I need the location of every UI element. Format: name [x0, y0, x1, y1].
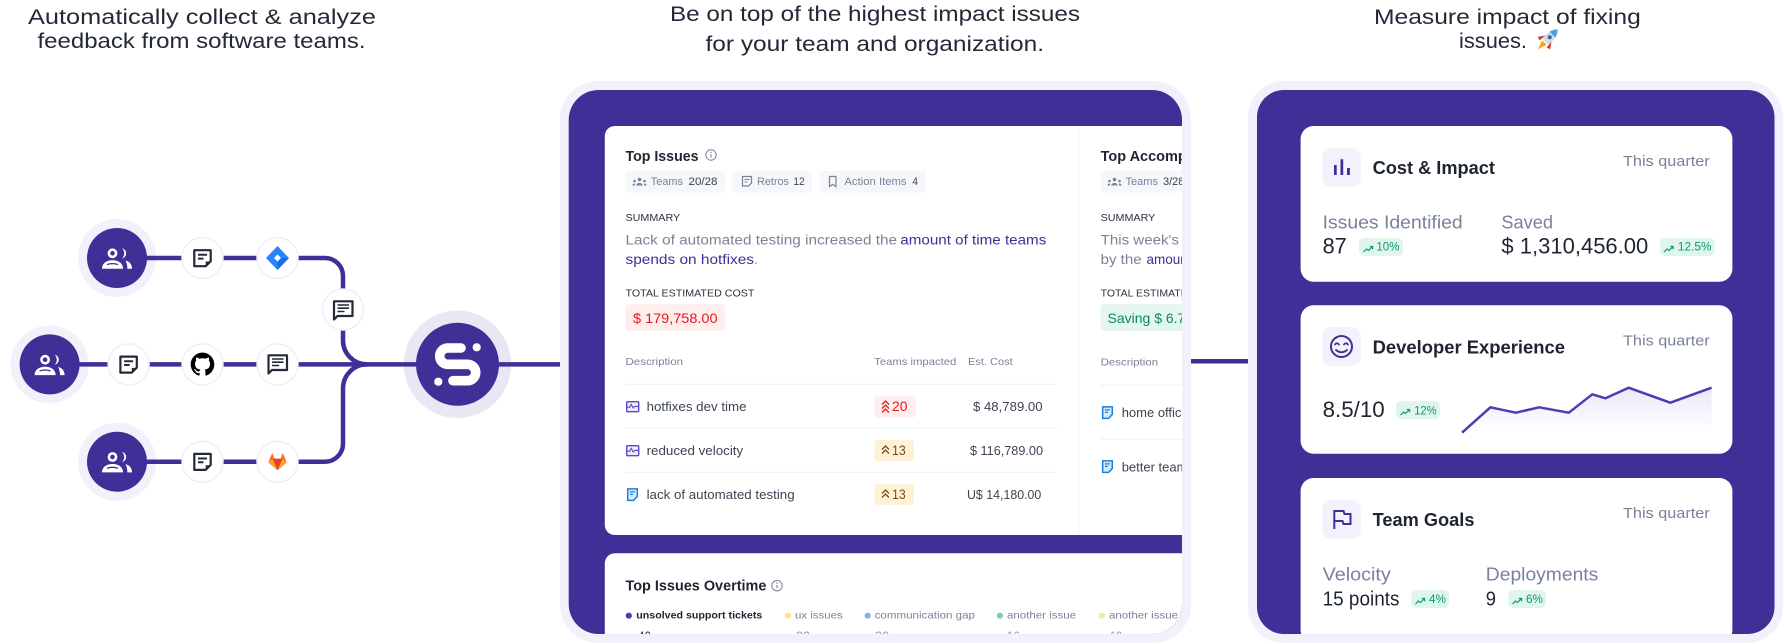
heading: highest impact issues: Be on top of the highest impact issues [670, 3, 1080, 26]
card: cost and impact: 87 [1323, 233, 1347, 258]
row: hotfixes dev time [627, 396, 1043, 417]
icon: smile [1322, 327, 1361, 366]
chart legend: ux issues [795, 610, 843, 622]
column: top accomplishments: better team [1122, 459, 1187, 474]
team node 1 [87, 228, 147, 288]
card: developer experience [1301, 305, 1732, 454]
icon: flag [1322, 500, 1361, 539]
card: top issues overtime: Top Issues Overtime [626, 579, 766, 595]
line chart [1462, 388, 1712, 433]
card: team goals: 15 points [1323, 588, 1400, 610]
legend values: 20 [875, 628, 889, 644]
icon: chat row 1 [322, 289, 364, 330]
column: top accomplishments [1100, 151, 1182, 474]
row: reduced velocity: $ 116,789.00 [970, 443, 1043, 458]
icon: bar chart [1322, 148, 1361, 187]
heading: collect and analyze: Automatically collect & analyze [28, 6, 376, 29]
card: cost and impact: Issues Identified [1323, 212, 1463, 232]
card: team goals: Deployments [1486, 564, 1598, 584]
summary: . [754, 252, 758, 267]
icon: github [182, 344, 223, 385]
card: developer experience: This quarter [1623, 332, 1710, 349]
column: top accomplishments: amount [1146, 252, 1192, 267]
row: lack of automated testing: U$ 14,180.00 [967, 487, 1041, 502]
hub logo [416, 323, 499, 406]
card: team goals: This quarter [1623, 505, 1710, 522]
stat chips: 12 [793, 176, 805, 188]
flow diagram: teams to hub [11, 219, 1248, 501]
column: top accomplishments: Teams [1126, 176, 1158, 188]
row: reduced velocity [627, 440, 1043, 461]
heading: highest impact issues [670, 3, 1080, 56]
icon: retro note row 3 [182, 441, 223, 482]
total estimated cost: TOTAL ESTIMATED COST [626, 288, 755, 300]
chart legend: communication gap [875, 610, 975, 622]
legend values: 16 [1007, 628, 1020, 644]
total estimated cost: $ 179,758.00 [633, 310, 718, 326]
icon: retro note row 1 [182, 238, 223, 278]
summary: Lack of automated testing increased the [626, 232, 897, 248]
card: developer experience: Developer Experience [1373, 337, 1565, 357]
legend values [640, 632, 1122, 634]
heading: highest impact issues: for your team and organization. [706, 33, 1044, 56]
chart legend: another issue [1007, 610, 1076, 622]
badge: 12.5%: 12.5% [1678, 240, 1712, 254]
card: developer experience: 8.5/10 [1323, 397, 1385, 422]
column: top accomplishments: Description [1101, 357, 1158, 369]
card: team goals [1301, 478, 1732, 643]
panel: impact metrics [1248, 81, 1783, 643]
heading: measure impact [1374, 6, 1641, 53]
row: lack of automated testing [628, 484, 1041, 505]
issues table header: Description [626, 356, 683, 368]
stat chips: Retros [757, 176, 789, 188]
icon: rocket [1532, 23, 1564, 55]
row: lack of automated testing: lack of automated testing [647, 487, 795, 502]
card: cost and impact: This quarter [1623, 153, 1710, 170]
chart legend [626, 611, 1178, 620]
card: top issues [604, 126, 1182, 535]
summary [626, 212, 1047, 267]
badge: 10% [1359, 238, 1403, 256]
heading: collect and analyze [28, 6, 376, 53]
stat chips: 4 [912, 176, 918, 188]
badge: 12%: 12% [1414, 403, 1437, 417]
row: lack of automated testing: 13 [892, 486, 906, 502]
heading: collect and analyze: feedback from software teams. [38, 30, 366, 53]
stat chips: 20/28 [688, 176, 718, 188]
stat chips [626, 171, 926, 193]
issues table header [626, 356, 1057, 472]
row: hotfixes dev time: 20 [892, 398, 908, 414]
badge: 12% [1396, 401, 1440, 419]
summary: SUMMARY [626, 212, 680, 224]
badge: 10%: 10% [1376, 240, 1400, 254]
chart legend: another issue [1109, 610, 1178, 622]
legend values: 23 [796, 628, 810, 644]
team node 2 [20, 334, 80, 394]
card: team goals: Velocity [1323, 564, 1391, 584]
column: top accomplishments: 3/28 [1163, 176, 1184, 188]
card: team goals: 9 [1486, 588, 1496, 610]
legend values: 12 [1110, 628, 1122, 644]
column: top accomplishments: by the [1101, 252, 1142, 267]
team node 3 [87, 432, 147, 492]
row: reduced velocity: 13 [892, 442, 906, 458]
badge: 6% [1508, 590, 1546, 608]
column: top accomplishments: Saving $ 6.7 [1108, 310, 1186, 326]
card: cost and impact [1301, 126, 1732, 282]
column: top accomplishments: home office [1122, 405, 1189, 420]
heading: measure impact: issues. [1459, 30, 1527, 53]
row: hotfixes dev time: $ 48,789.00 [973, 399, 1043, 414]
icon: retro note row 2 [108, 344, 149, 385]
total estimated cost [626, 288, 755, 331]
icon: gitlab [257, 441, 298, 482]
badge: 4%: 4% [1429, 592, 1446, 606]
icon: chat row 2 [257, 344, 298, 385]
summary: amount of time teams [900, 232, 1047, 248]
card: team goals: Team Goals [1373, 510, 1474, 530]
badge: 6%: 6% [1526, 592, 1543, 606]
connector lines [50, 258, 1248, 462]
stat chips: Teams [651, 176, 683, 188]
badge: 4% [1411, 590, 1449, 608]
card: cost and impact: Saved [1501, 212, 1553, 232]
heading: measure impact: Measure impact of fixing [1374, 6, 1641, 29]
column: top accomplishments: Top Accomplishments [1101, 149, 1254, 165]
card: cost and impact: Cost & Impact [1373, 158, 1495, 178]
summary: spends on hotfixes [626, 252, 754, 267]
card heading: Top Issues [626, 149, 698, 165]
icon: jira [257, 238, 298, 278]
legend values: 40 [638, 628, 651, 644]
issues table header: Est. Cost [968, 356, 1013, 368]
row: hotfixes dev time: hotfixes dev time [647, 399, 746, 414]
stat chips: Action Items [844, 176, 907, 188]
column: top accomplishments: SUMMARY [1101, 212, 1155, 224]
card: cost and impact: $ 1,310,456.00 [1501, 233, 1648, 258]
badge: 12.5% [1660, 238, 1715, 256]
chart legend: unsolved support tickets [636, 610, 762, 622]
row: reduced velocity: reduced velocity [647, 443, 744, 458]
column: top accomplishments: TOTAL ESTIMATED [1101, 288, 1196, 300]
column: top accomplishments: This week's [1101, 232, 1179, 248]
card: top issues overtime [604, 553, 1182, 634]
panel: issues dashboard [560, 81, 1254, 644]
issues table header: Teams impacted [874, 356, 956, 368]
